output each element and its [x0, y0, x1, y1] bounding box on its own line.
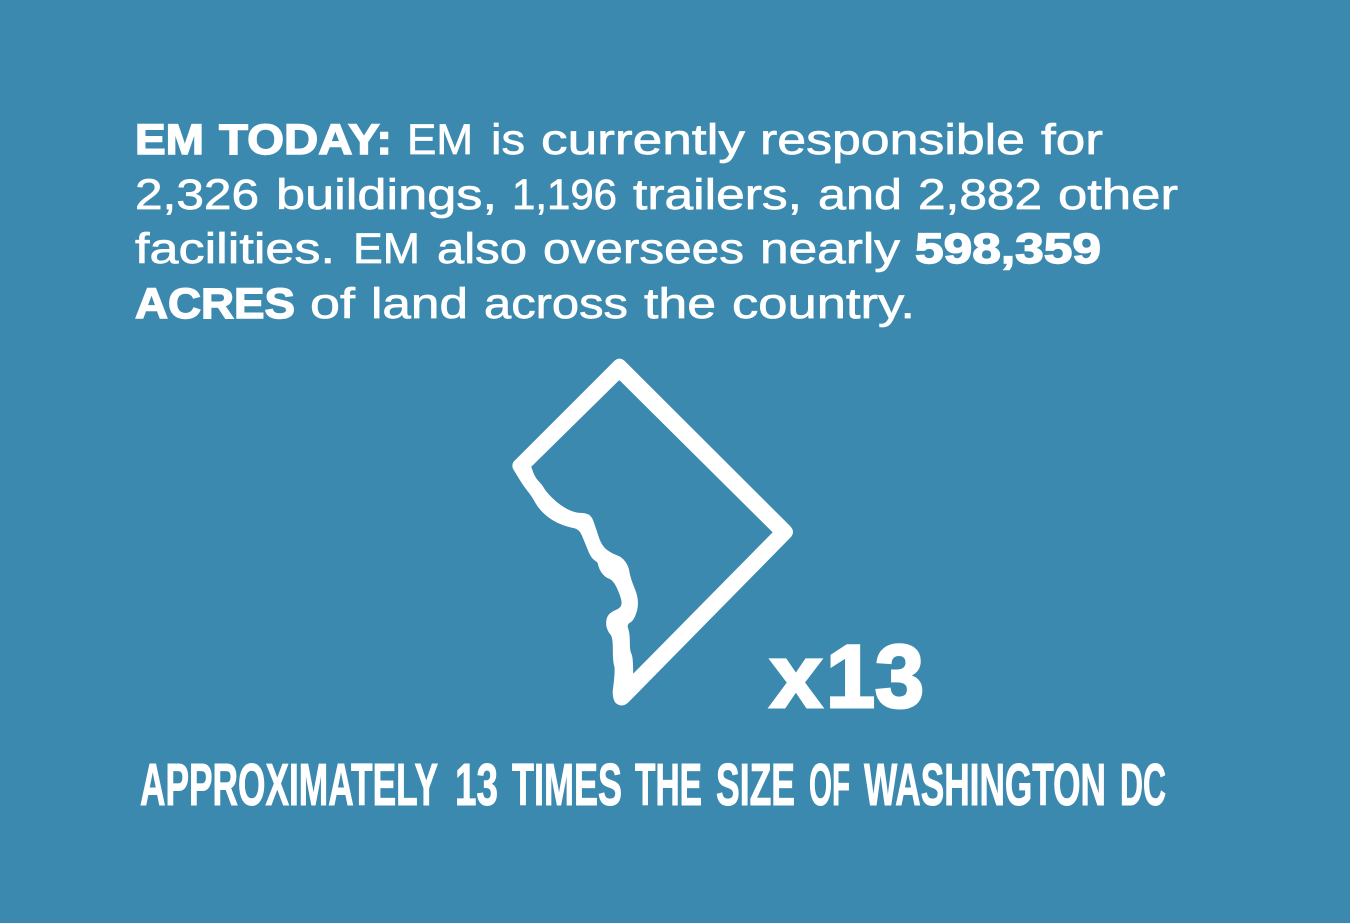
- caption: size comparison: 13: [455, 752, 498, 818]
- body copy: currently: [541, 116, 746, 164]
- multiplier: x13: x: [770, 626, 822, 726]
- caption: size comparison: WASHINGTON: [864, 752, 1106, 818]
- body copy: EM: [407, 116, 473, 164]
- caption: size comparison: TIMES: [512, 752, 622, 818]
- body copy: for: [1041, 116, 1103, 164]
- multiplier: x13: [770, 626, 924, 726]
- body copy: the: [644, 280, 716, 328]
- caption: size comparison: DC: [1120, 752, 1166, 818]
- bold emphasis: heading and acreage: [135, 116, 1101, 328]
- caption: size comparison: SIZE: [716, 752, 795, 818]
- body copy: land: [371, 280, 468, 328]
- bold emphasis: heading and acreage: ACRES: [135, 280, 295, 328]
- caption: size comparison: APPROXIMATELY: [140, 752, 438, 818]
- text block: EM today summary: [135, 116, 1178, 328]
- body copy: across: [484, 280, 628, 328]
- body copy: 2,882: [918, 171, 1042, 219]
- body copy: 1,196: [512, 171, 617, 219]
- caption: size comparison: OF: [809, 752, 850, 818]
- multiplier: x13: 13: [826, 626, 924, 726]
- body copy: trailers,: [633, 171, 802, 219]
- bold emphasis: heading and acreage: TODAY:: [219, 116, 392, 164]
- body copy: facilities.: [135, 225, 335, 273]
- body copy: [135, 116, 1178, 328]
- body copy: is: [491, 116, 525, 164]
- body copy: of: [310, 280, 356, 328]
- body copy: oversees: [543, 225, 744, 273]
- body copy: nearly: [760, 225, 901, 273]
- body copy: responsible: [760, 116, 1025, 164]
- body copy: country.: [732, 280, 915, 328]
- body copy: EM: [353, 225, 420, 273]
- body copy: and: [818, 171, 902, 219]
- body copy: 2,326: [135, 171, 259, 219]
- body copy: also: [437, 225, 527, 273]
- bold emphasis: heading and acreage: EM: [135, 116, 204, 164]
- body copy: other: [1058, 171, 1178, 219]
- caption: size comparison: THE: [635, 752, 702, 818]
- bold emphasis: heading and acreage: 598,359: [915, 225, 1101, 273]
- body copy: buildings,: [276, 171, 497, 219]
- caption: size comparison: [140, 752, 1166, 818]
- icon: Washington DC outline: [513, 359, 792, 705]
